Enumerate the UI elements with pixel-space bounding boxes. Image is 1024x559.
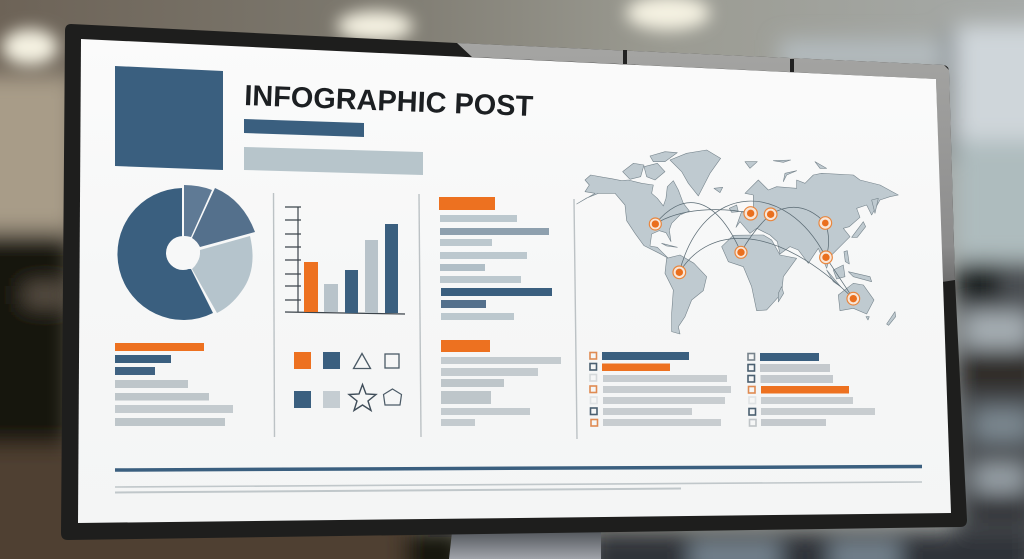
text bars: legend below donut — [115, 343, 233, 426]
bar chart — [285, 207, 405, 314]
monitor stand — [449, 532, 601, 559]
icon: star — [349, 384, 376, 410]
world map — [577, 150, 898, 334]
text bars: column 3 top — [439, 197, 552, 320]
icon: pentagon — [384, 389, 402, 405]
checklist left — [590, 352, 731, 426]
connection arcs — [655, 201, 853, 299]
icon: orange square — [294, 352, 311, 369]
description bar — [244, 147, 423, 175]
title: INFOGRAPHIC POST — [244, 80, 534, 123]
dividers — [274, 193, 577, 439]
subtitle bar — [244, 119, 364, 137]
icon: navy square — [323, 352, 340, 369]
footer rules — [115, 466, 922, 492]
icon grid — [294, 352, 402, 410]
checklist right — [748, 353, 875, 426]
icon: gray square — [323, 391, 340, 408]
screen — [78, 39, 951, 523]
icon: square outline — [385, 354, 399, 368]
land masses — [577, 150, 898, 334]
bars — [304, 262, 318, 312]
header block — [115, 66, 534, 175]
donut chart — [117, 185, 255, 320]
icon: navy square 2 — [294, 391, 311, 408]
location markers — [649, 207, 860, 305]
header square — [115, 66, 223, 170]
icon: triangle — [354, 354, 370, 368]
text bars: column 3 bottom — [441, 340, 561, 426]
ceiling lights — [2, 0, 710, 65]
axis — [285, 207, 405, 314]
